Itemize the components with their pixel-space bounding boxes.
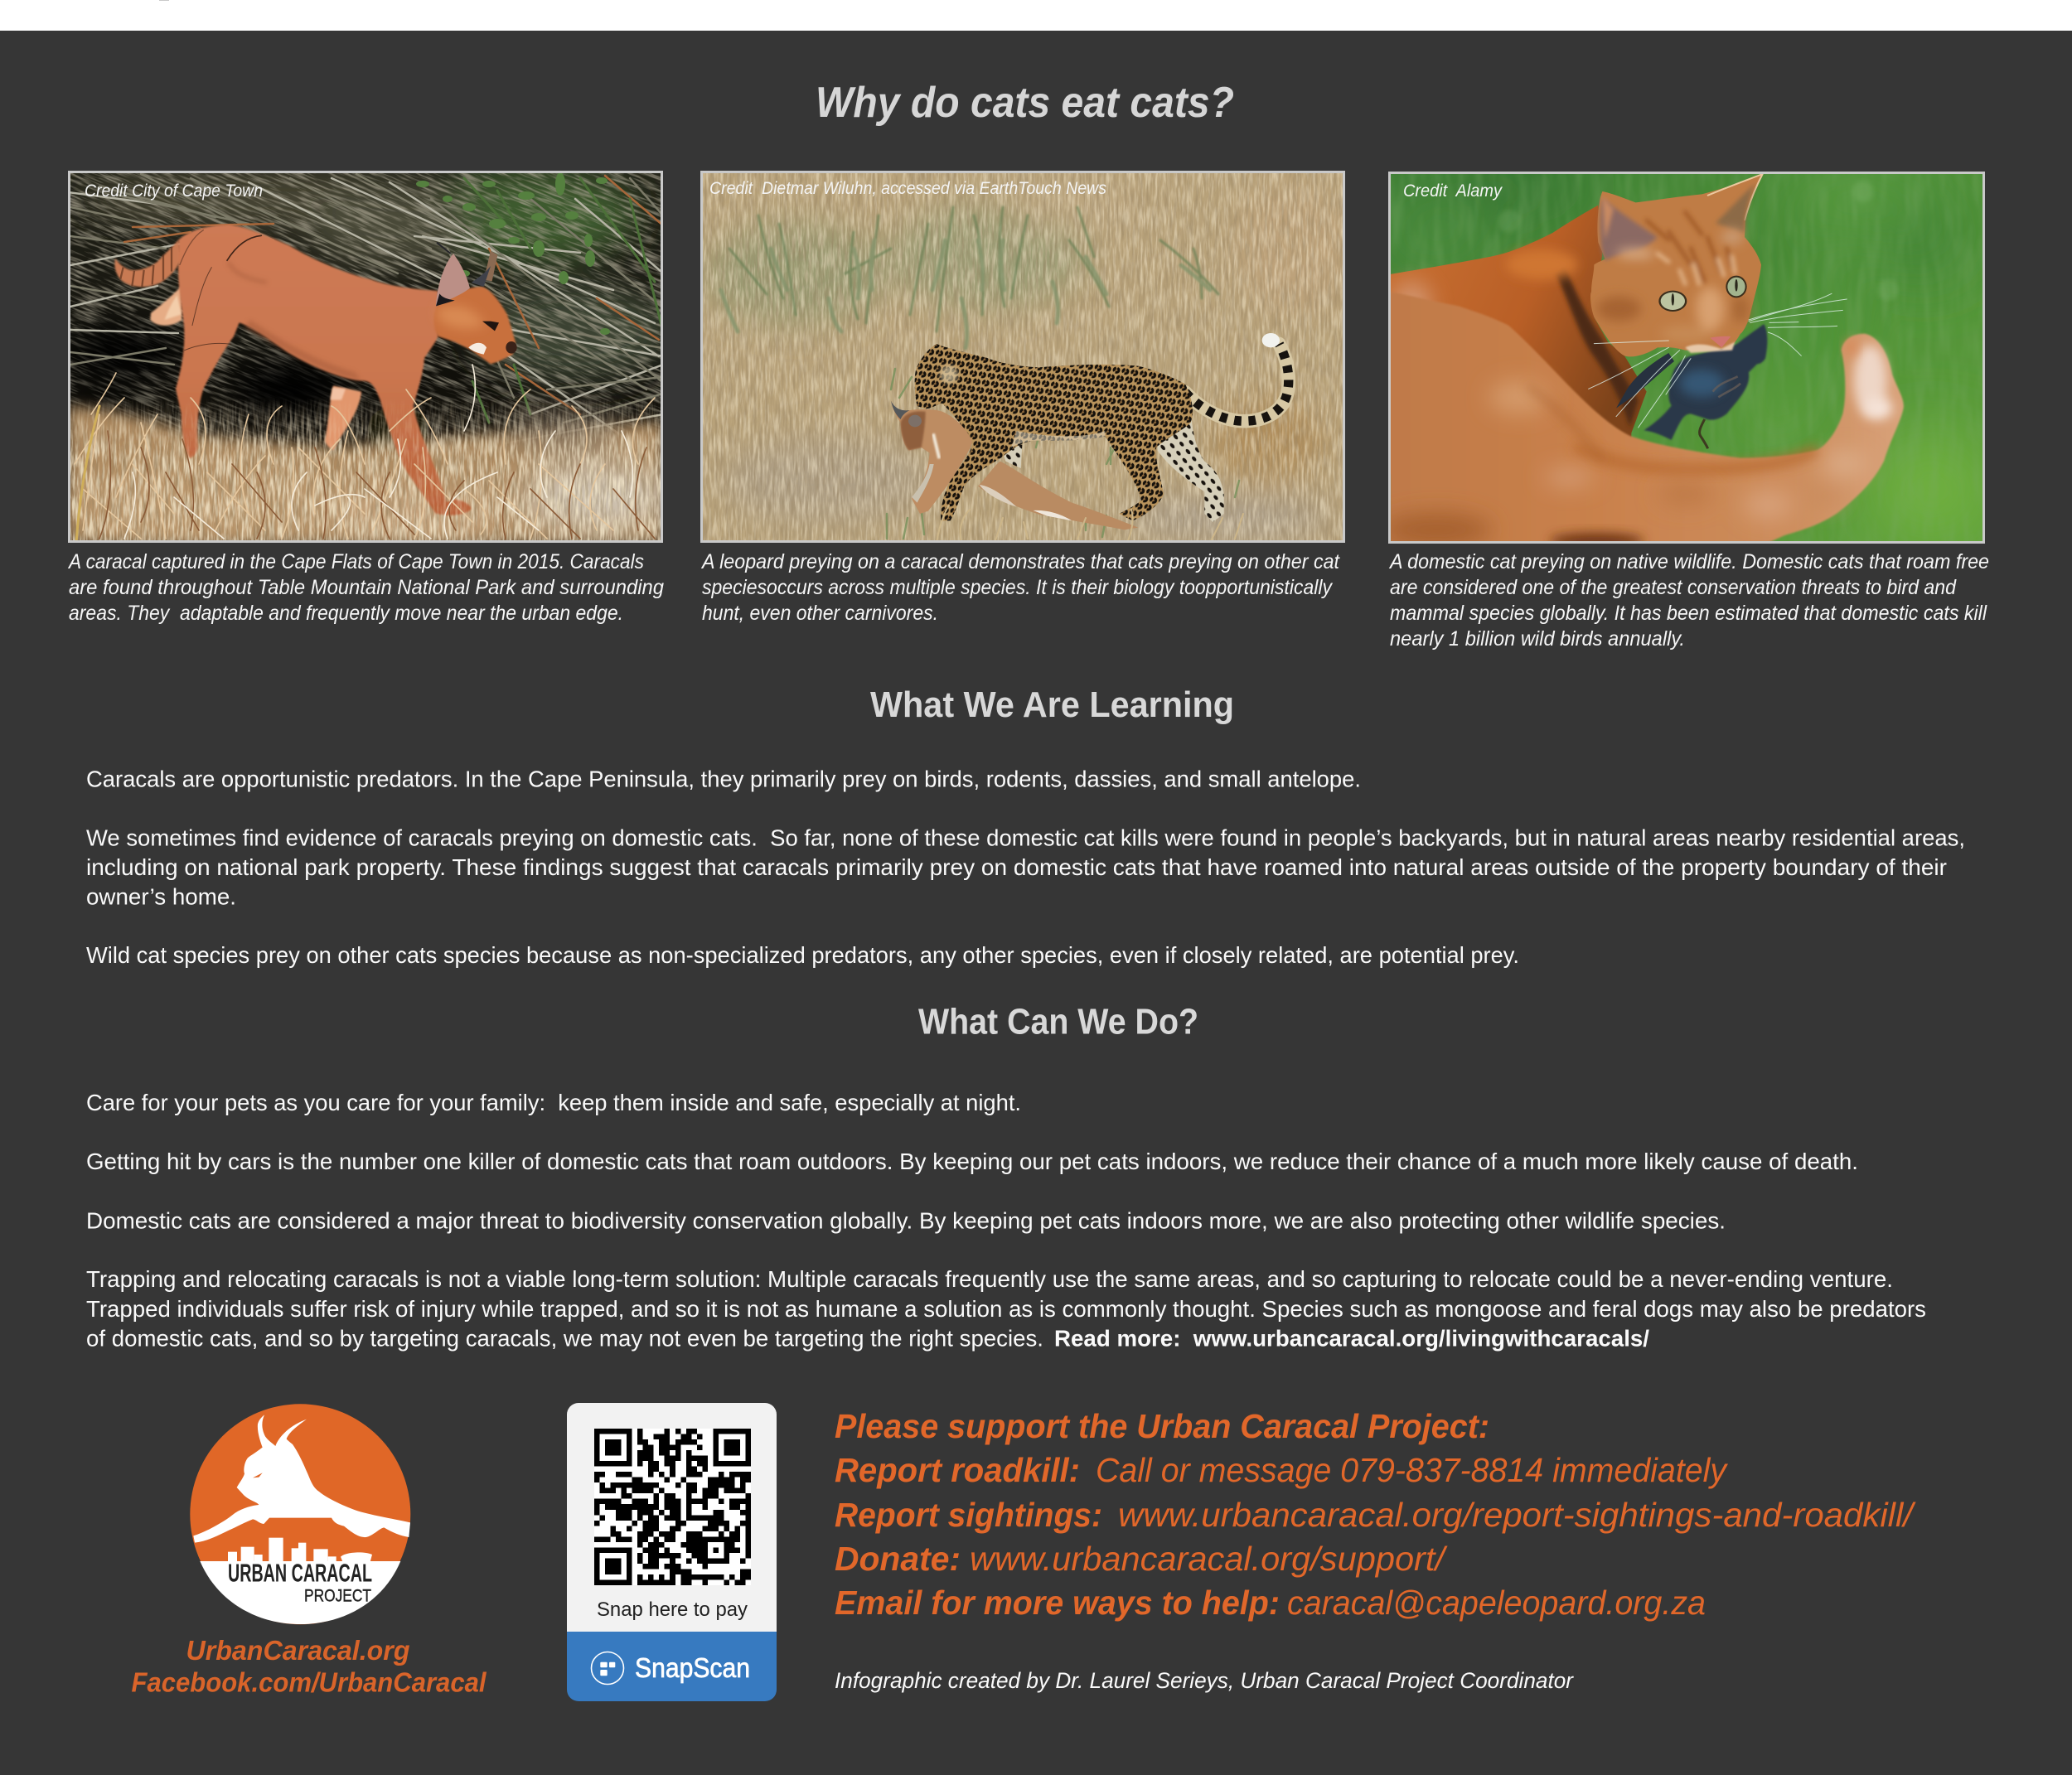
caption: caracal: areas. They adaptable and frequently move near the urban edge. [69, 602, 623, 625]
caption: leopard: speciesoccurs across multiple species. It is their biology toopportunistically [702, 576, 1333, 599]
caption: domestic cat [1388, 550, 1989, 651]
caption: caracal: A caracal captured in the Cape Flats of Cape Town in 2015. Caracals [67, 550, 644, 573]
tail [1185, 344, 1289, 421]
bokeh highlights [1498, 181, 1899, 301]
green shrubs [721, 207, 1218, 348]
deep shadows [66, 327, 431, 456]
cheek highlight [940, 365, 958, 383]
caption: leopard: A leopard preying on a caracal demonstrates that cats preying on other cat [700, 550, 1340, 573]
text block: support calls to action: www.urbancaracal.org/support/ [970, 1540, 1448, 1578]
text block: learning: including on national park property. These findings suggest that caracals primarily prey on domestic cats that have roamed into natural areas outside of the property boundary of their [86, 854, 1947, 880]
qr code [594, 1429, 751, 1585]
cat shoulder and neck [1390, 206, 1647, 475]
nose and mouth [1710, 336, 1731, 347]
image border [70, 172, 661, 542]
text block: learning: owner’s home. [86, 883, 236, 910]
logo: city skyline [228, 1538, 372, 1562]
top white band [0, 0, 2072, 31]
caracal [114, 225, 517, 515]
text block: support calls to action: Donate: [835, 1540, 961, 1578]
body [176, 225, 472, 515]
haunch and tail [1390, 292, 1904, 543]
logo: urban caracal project [190, 1404, 410, 1624]
text block: actions: Trapping and relocating caracals is not a viable long-term solution: Multiple caracals frequently use the same areas, and so capturing to relocate could be a never-ending venture. [86, 1266, 1893, 1292]
far hind leg [150, 285, 182, 326]
text block: support calls to action: Report sightings: [835, 1496, 1102, 1534]
tail [114, 239, 182, 287]
diagonal reed texture [70, 173, 661, 447]
panel: leopard photo [700, 171, 1351, 543]
grass in front of feet [937, 505, 1243, 543]
rim light on ears [1707, 174, 1763, 220]
foreground grass blades [75, 365, 655, 543]
photo credit: Credit Alamy [1403, 181, 1503, 201]
tail fur shading [1575, 447, 1818, 470]
snap here to pay label: Snap here to pay [597, 1598, 748, 1621]
caption: caracal [67, 550, 664, 625]
text block: actions: Domestic cats are considered a major threat to biodiversity conservation globally. By keeping pet cats indoors more, we are also protecting other wildlife species. [86, 1208, 1726, 1233]
muzzle and eye [468, 343, 487, 355]
photo credit: Credit Dietmar Wiluhn, accessed via EarthTouch News [709, 179, 1106, 198]
title: Why do cats eat cats? [816, 79, 1234, 127]
text block: learning [86, 766, 1965, 968]
prey caracal head and foreleg [891, 400, 972, 514]
caption: domestic cat: nearly 1 billion wild birds annually. [1390, 627, 1685, 651]
text block: support calls to action: Report roadkill: [835, 1451, 1080, 1489]
caption: domestic cat: A domestic cat preying on native wildlife. Domestic cats that roam free [1388, 550, 1989, 573]
caption: domestic cat: are considered one of the greatest conservation threats to bird and [1390, 576, 1957, 599]
caption: leopard: hunt, even other carnivores. [702, 602, 938, 625]
text block: learning: Caracals are opportunistic predators. In the Cape Peninsula, they primarily prey on birds, rodents, dassies, and small antelope. [86, 766, 1361, 792]
logo: caracal and mountain silhouette [193, 1415, 410, 1543]
fur marks [180, 230, 261, 351]
text block: support calls to action: caracal@capeleopard.org.za [1287, 1584, 1706, 1622]
text block: actions: Care for your pets as you care for your family: keep them inside and safe, especially at night. [86, 1090, 1021, 1115]
eyes [1658, 276, 1747, 312]
far front leg [325, 385, 361, 450]
logo: eye [253, 1473, 263, 1478]
text block: actions: Getting hit by cars is the number one killer of domestic cats that roam outdoors. By keeping our pet cats indoors, we reduce their chance of a much more likely cause of death. [86, 1149, 1858, 1174]
ear interiors [1600, 198, 1658, 260]
web and social links [131, 1635, 487, 1697]
ground and dry grass [68, 406, 663, 543]
leopard near body [915, 344, 1193, 520]
panel: caracal photo [68, 171, 663, 543]
logo: white lower segment [200, 1561, 400, 1624]
caption: domestic cat: mammal species globally. It has been estimated that domestic cats kill [1390, 602, 1987, 625]
text block: support calls to action [835, 1407, 1916, 1622]
foliage tones behind reeds [83, 170, 671, 381]
panel: domestic cat photo [1382, 163, 1997, 549]
caption: caracal: are found throughout Table Mountain National Park and surrounding [69, 576, 664, 599]
belly highlight [1011, 431, 1105, 447]
creator credit: Infographic created by Dr. Laurel Serieys, Urban Caracal Project Coordinator [835, 1668, 1574, 1693]
text block: support calls to action: www.urbancaracal.org/report-sightings-and-roadkill/ [1118, 1496, 1916, 1534]
prey caracal body on ground [978, 462, 1138, 530]
ear [436, 254, 470, 306]
whiskers [1589, 293, 1847, 428]
text block: support calls to action: Call or message 079-837-8814 immediately [1096, 1451, 1728, 1489]
tabby and light patches [1597, 230, 1749, 342]
panel: snapscan card [567, 1403, 777, 1701]
reeds [68, 174, 663, 447]
leaves [416, 172, 610, 335]
icon: snapscan mark [592, 1652, 623, 1684]
text block: learning: Wild cat species prey on other cats species because as non-specialized predators, any other species, even if closely related, are potential prey. [86, 942, 1519, 968]
logo: wordmark: URBAN CARACAL [228, 1558, 372, 1588]
text block: actions: Read more: www.urbancaracal.org/livingwithcaracals/ [1054, 1326, 1649, 1351]
head [1590, 174, 1763, 356]
text block: learning: We sometimes find evidence of caracals preying on domestic cats. So far, none of these domestic cat kills were found in people’s backyards, but in natural areas nearby residential areas, [86, 825, 1965, 850]
green grass tufts [887, 369, 1239, 539]
text block: support calls to action: Email for more ways to help: [835, 1584, 1280, 1622]
far front leg [1000, 445, 1022, 468]
text block: actions: of domestic cats, and so by targeting caracals, we may not even be targeting the right species. [86, 1326, 1043, 1351]
light grass wash over lower legs [68, 398, 663, 543]
neck shadow [1556, 264, 1639, 428]
dark lower edge [1550, 533, 1644, 549]
image border [701, 172, 1344, 542]
logo: project label: PROJECT [304, 1586, 371, 1606]
fur light on upper shoulder [1506, 249, 1577, 280]
underbelly dark fur [244, 320, 361, 380]
head [433, 287, 516, 364]
web and social links: UrbanCaracal.org [186, 1635, 409, 1666]
heading: what can we do: What Can We Do? [918, 1001, 1198, 1042]
bird tail feathers [1616, 353, 1674, 409]
text block: support calls to action: Please support the Urban Caracal Project: [835, 1407, 1489, 1445]
web and social links: Facebook.com/UrbanCaracal [131, 1667, 487, 1697]
bird [1644, 324, 1767, 448]
photo credit: Credit City of Cape Town [85, 181, 263, 201]
image border [1389, 172, 1984, 542]
text block: actions: Trapped individuals suffer risk of injury while trapped, and so it is not as humane a solution as is commonly thought. Species such as mongoose and feral dogs may also be predators [86, 1296, 1926, 1322]
caption: leopard [700, 550, 1340, 625]
snapscan wordmark: SnapScan [635, 1652, 750, 1683]
text block: actions [86, 1090, 1926, 1351]
heading: what we are learning: What We Are Learning [870, 684, 1234, 725]
far hind leg [1158, 409, 1224, 522]
